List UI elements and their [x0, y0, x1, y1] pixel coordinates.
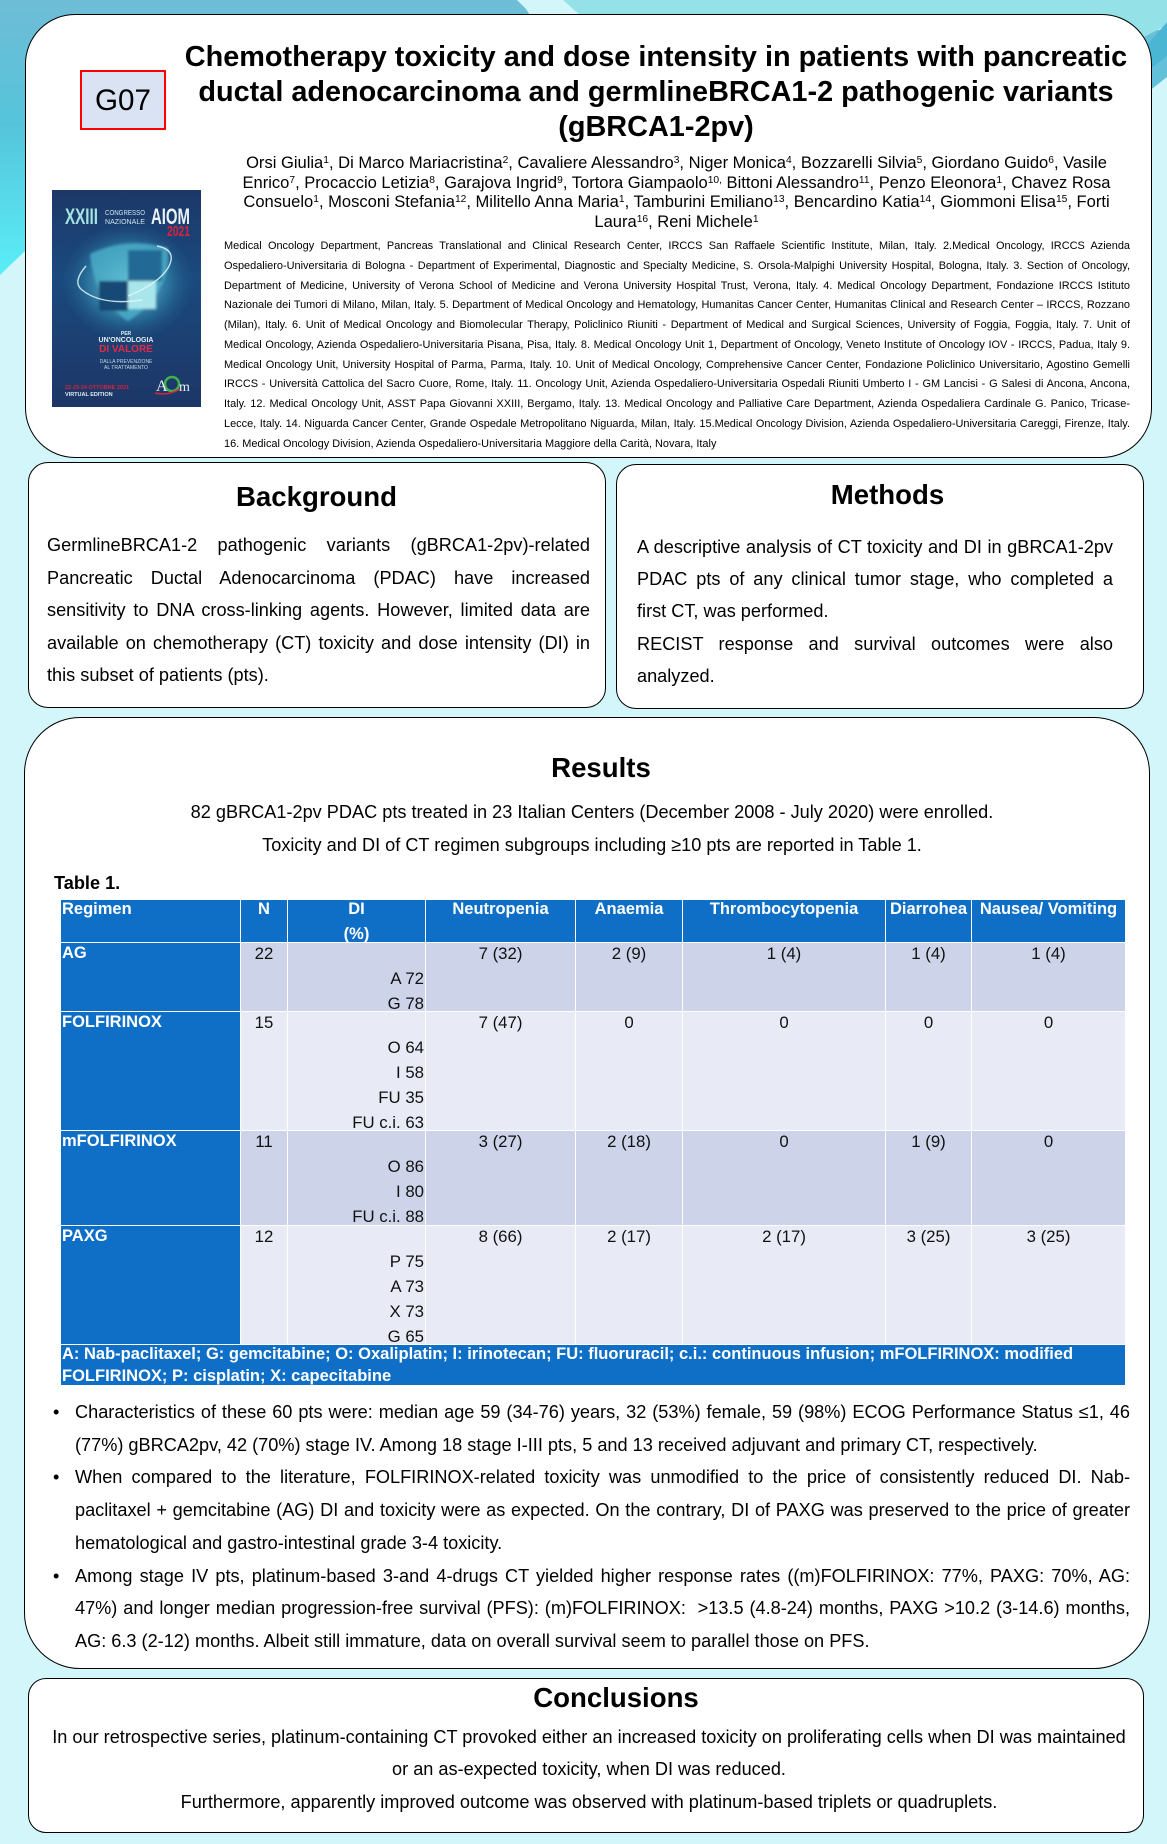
heading: methods: Methods — [831, 479, 944, 510]
bullet 1: Characteristics of these 60 pts were: median age 59 (34-76) years, 32 (53%) female, 59 (98%) ECOG Performance Status ≤1, 46 — [75, 1402, 1130, 1422]
table 1: 1 (4) — [1031, 944, 1066, 962]
bullet 2: hematological and gastro-intestinal grade 3-4 toxicity. — [75, 1533, 502, 1553]
table 1: 2 (9) — [612, 944, 646, 962]
panel: header — [25, 14, 1152, 458]
affiliations: IRCCS - Università Cattolica del Sacro Cuore, Rome, Italy. 11. Oncology Unit, Azienda Ospedaliero-Universitaria Ospedali Riuniti Umberto I - GM Lancisi - G Salesi di Ancona, Ancona, — [224, 378, 1130, 390]
bullet 1: • — [53, 1402, 59, 1422]
table 1: Anaemia — [595, 900, 663, 918]
title: Chemotherapy toxicity and dose intensity in patients with pancreatic — [185, 41, 1127, 73]
table 1 — [61, 900, 1125, 1385]
congress poster image: 2021 — [167, 223, 190, 240]
table 1: A 73 — [390, 1276, 424, 1296]
table 1: 0 — [624, 1012, 634, 1032]
congress poster image: DALLA PREVENZIONE — [100, 359, 153, 365]
authors: Laura16, Reni Michele1 — [594, 212, 759, 231]
table 1: 1 (4) — [911, 944, 946, 962]
table 1: 7 (47) — [479, 1012, 522, 1032]
title: (gBRCA1-2pv) — [558, 111, 754, 143]
table 1: 8 (66) — [479, 1226, 522, 1246]
methods text: PDAC pts of any clinical tumor stage, who completed a — [637, 569, 1113, 589]
table 1: I 58 — [396, 1062, 424, 1082]
congress poster image: XXIII — [65, 204, 98, 229]
affiliations: 16. Medical Oncology Division, Azienda Ospedaliero-Universitaria Maggiore della Carità, Novara, Italy — [224, 438, 716, 450]
label: abstract code G07: G07 — [95, 84, 151, 117]
background text: sensitivity to DNA cross-linking agents. However, limited data are — [47, 600, 590, 620]
authors — [242, 153, 1110, 231]
conclusions text: In our retrospective series, platinum-containing CT provoked either an increased toxicity on proliferating cells when DI was maintained — [52, 1727, 1126, 1747]
table 1: Nausea/ Vomiting — [980, 900, 1117, 918]
congress poster image: UN'ONCOLOGIA — [99, 337, 153, 344]
authors: Consuelo1, Mosconi Stefania12, Militello Anna Maria1, Tamburini Emiliano13, Bencardino Katia14, Giommoni Elisa15, Forti — [243, 192, 1110, 211]
table 1: G 65 — [388, 1326, 424, 1346]
bullet 2: • — [53, 1467, 59, 1487]
methods text — [637, 536, 1113, 686]
conclusions text — [52, 1727, 1126, 1812]
table 1: 15 — [255, 1012, 273, 1032]
congress poster image — [52, 190, 201, 407]
affiliations: Medical Oncology, Azienda Ospedaliero-Universitaria Pisana, Pisa, Italy. 8. Medical Oncology Unit 1, Department of Oncology, Veneto Institute of Oncology IOV - IRCCS, Padua, Italy 9. — [224, 339, 1130, 351]
table 1: G 78 — [388, 994, 424, 1012]
background text: this subset of patients (pts). — [47, 665, 269, 685]
table 1: 2 (17) — [762, 1226, 806, 1246]
affiliations: Lecce, Italy. 14. Niguarda Cancer Center, Grande Ospedale Metropolitano Niguarda, Milan, Italy. 15.Medical Oncology Division, Azienda Ospedaliero-Universitaria Careggi, Firenze, Italy. — [224, 418, 1130, 430]
panel: background — [28, 462, 606, 708]
table 1: 0 — [779, 1012, 789, 1032]
bullet 2 — [53, 1467, 1130, 1553]
table 1: 7 (32) — [479, 944, 522, 962]
authors: Orsi Giulia1, Di Marco Mariacristina2, Cavaliere Alessandro3, Niger Monica4, Bozzarelli Silvia5, Giordano Guido6, Vasile — [246, 153, 1107, 172]
background text: GermlineBRCA1-2 pathogenic variants (gBRCA1-2pv)-related — [47, 535, 590, 555]
table 1: 12 — [255, 1226, 273, 1246]
affiliations: Nazionale dei Tumori di Milano, Milan, Italy. 5. Department of Medical Oncology and Hematology, Humanitas Cancer Center, Humanitas Clinical and Research Center – IRCCS, Rozzano — [224, 299, 1130, 311]
table 1: N — [258, 900, 270, 918]
table 1: I 80 — [396, 1182, 424, 1200]
table 1: A: Nab-paclitaxel; G: gemcitabine; O: Oxaliplatin; I: irinotecan; FU: fluoruracil; c.i.: continuous infusion; mFOLFIRINOX: modified — [62, 1345, 1073, 1363]
methods text: A descriptive analysis of CT toxicity and DI in gBRCA1-2pv — [637, 536, 1113, 556]
affiliations: Department of Medicine, University of Verona School of Medicine and Verona University Hospital Trust, Verona, Italy. 4. Medical Oncology Department, Fondazione IRCCS Istituto — [224, 280, 1130, 292]
table 1: DI — [348, 900, 365, 918]
table 1: (%) — [344, 925, 369, 943]
table 1: 1 (9) — [911, 1132, 946, 1150]
results intro: Toxicity and DI of CT regimen subgroups including ≥10 pts are reported in Table 1. — [262, 835, 922, 855]
table 1: O 86 — [388, 1156, 424, 1176]
table 1: Regimen — [62, 900, 132, 918]
table 1: 0 — [924, 1012, 933, 1032]
heading: background: Background — [236, 481, 397, 512]
background text: available on chemotherapy (CT) toxicity and dose intensity (DI) in — [47, 632, 590, 652]
bullet 3: Among stage IV pts, platinum-based 3-and 4-drugs CT yielded higher response rates ((m)FOLFIRINOX: 77%, PAXG: 70%, AG: — [75, 1566, 1130, 1586]
congress poster image: m — [179, 380, 190, 395]
table 1: 3 (25) — [907, 1226, 950, 1246]
table 1: Neutropenia — [452, 900, 549, 918]
conclusions text: or an as-expected toxicity, when DI was reduced. — [392, 1759, 786, 1779]
title: ductal adenocarcinoma and germlineBRCA1-2 pathogenic variants — [198, 76, 1114, 108]
panel: methods — [616, 464, 1144, 709]
table 1: PAXG — [62, 1226, 108, 1244]
table 1: O 64 — [388, 1038, 424, 1056]
table 1: FU c.i. 63 — [352, 1112, 424, 1132]
table 1: FU 35 — [378, 1088, 424, 1106]
panel: results — [24, 717, 1150, 1669]
table 1: 11 — [255, 1132, 273, 1150]
affiliations: Medical Oncology Unit, University Hospital of Parma, Parma, Italy. 10. Unit of Medical Oncology, Comprehensive Cancer Center, Fondazione Policlinico Universitario, Agostino Gemelli — [224, 359, 1130, 371]
congress poster image: PER — [121, 331, 132, 337]
table 1: FU c.i. 88 — [352, 1206, 424, 1226]
methods text: analyzed. — [637, 666, 715, 686]
bullet 2: When compared to the literature, FOLFIRINOX-related toxicity was unmodified to the price of consistently reduced DI. Nab- — [75, 1467, 1130, 1487]
congress poster image: CONGRESSO — [105, 208, 145, 217]
congress poster image: NAZIONALE — [105, 217, 145, 226]
affiliations: Medical Oncology Department, Pancreas Translational and Clinical Research Center, IRCCS San Raffaele Scientific Institute, Milan, Italy. 2.Medical Oncology, IRCCS Azienda — [224, 240, 1130, 252]
table 1: Thrombocytopenia — [710, 900, 858, 918]
table 1: 0 — [1044, 1012, 1053, 1032]
heading: conclusions: Conclusions — [533, 1682, 699, 1713]
table 1: AG — [62, 944, 87, 962]
table 1: 2 (18) — [607, 1132, 651, 1150]
affiliations: Italy. 12. Medical Oncology Unit, ASST Papa Giovanni XXIII, Bergamo, Italy. 13. Medical Oncology and Palliative Care Department, Azienda Ospedaliera Cardinale G. Panico, Tricase- — [224, 398, 1130, 410]
methods text: RECIST response and survival outcomes were also — [637, 634, 1113, 654]
table 1: 2 (17) — [607, 1226, 651, 1246]
authors: Enrico7, Procaccio Letizia8, Garajova Ingrid9, Tortora Giampaolo10, Bittoni Alessandro11, Penzo Eleonora1, Chavez Rosa — [242, 173, 1110, 192]
congress poster image: A — [156, 378, 168, 395]
congress poster image: DI VALORE — [99, 344, 153, 355]
table caption: Table 1. — [54, 873, 120, 893]
heading: results: Results — [551, 752, 651, 783]
results intro: 82 gBRCA1-2pv PDAC pts treated in 23 Italian Centers (December 2008 - July 2020) were enrolled. — [191, 802, 993, 822]
table 1: FOLFIRINOX — [62, 1012, 162, 1030]
table 1: P 75 — [390, 1252, 424, 1270]
label: abstract code G07 — [80, 70, 166, 130]
bullet 1 — [53, 1402, 1130, 1455]
table 1: 22 — [255, 944, 273, 962]
bullet 1: (77%) gBRCA2pv, 42 (70%) stage IV. Among 18 stage I-III pts, 5 and 13 received adjuvant and primary CT, respectively. — [75, 1435, 1038, 1455]
table 1: X 73 — [389, 1302, 424, 1320]
table 1: 1 (4) — [767, 944, 801, 962]
table 1: 0 — [779, 1132, 789, 1150]
conclusions text: Furthermore, apparently improved outcome was observed with platinum-based triplets or quadruplets. — [181, 1792, 997, 1812]
bullet 2: paclitaxel + gemcitabine (AG) DI and toxicity were as expected. On the contrary, DI of PAXG was preserved to the price of greater — [75, 1500, 1130, 1520]
affiliations — [224, 240, 1130, 450]
title — [185, 41, 1127, 143]
table 1: 3 (25) — [1027, 1226, 1070, 1246]
methods text: first CT, was performed. — [637, 601, 829, 621]
table 1: mFOLFIRINOX — [62, 1132, 177, 1150]
results intro — [191, 802, 993, 855]
bullet 3 — [53, 1566, 1130, 1651]
affiliations: (Milan), Italy. 6. Unit of Medical Oncology and Biomolecular Therapy, Policlinico Riuniti - Department of Medical and Surgical Sciences, University of Foggia, Foggia, Italy. 7. Unit of — [224, 319, 1130, 331]
table 1: 0 — [1044, 1132, 1053, 1150]
table 1: 3 (27) — [479, 1132, 522, 1150]
background text — [47, 535, 590, 685]
bullet 3: 47%) and longer median progression-free survival (PFS): (m)FOLFIRINOX: >13.5 (4.8-24) months, PAXG >10.2 (3-14.6) months, — [75, 1598, 1130, 1618]
affiliations: Ospedaliero-Universitaria di Bologna - Department of Experimental, Diagnostic and Specialty Medicine, S. Orsola-Malpighi University Hospital, Bologna, Italy. 3. Section of Oncology, — [224, 260, 1130, 272]
results bullets — [53, 1402, 1130, 1651]
table 1: A 72 — [390, 968, 424, 988]
table 1: Diarrohea — [890, 900, 967, 918]
table 1: FOLFIRINOX; P: cisplatin; X: capecitabine — [62, 1366, 391, 1384]
bullet 3: AG: 6.3 (2-12) months. Albeit still immature, data on overall survival seem to parallel those on PFS. — [75, 1631, 870, 1651]
bullet 3: • — [53, 1566, 59, 1586]
panel: conclusions — [28, 1678, 1144, 1833]
congress poster image: AL TRATTAMENTO — [104, 365, 148, 371]
background text: Pancreatic Ductal Adenocarcinoma (PDAC) have increased — [47, 568, 590, 588]
congress poster image: VIRTUAL EDITION — [65, 392, 113, 398]
congress poster image: 22-23-24 OTTOBRE 2021 — [65, 385, 129, 391]
